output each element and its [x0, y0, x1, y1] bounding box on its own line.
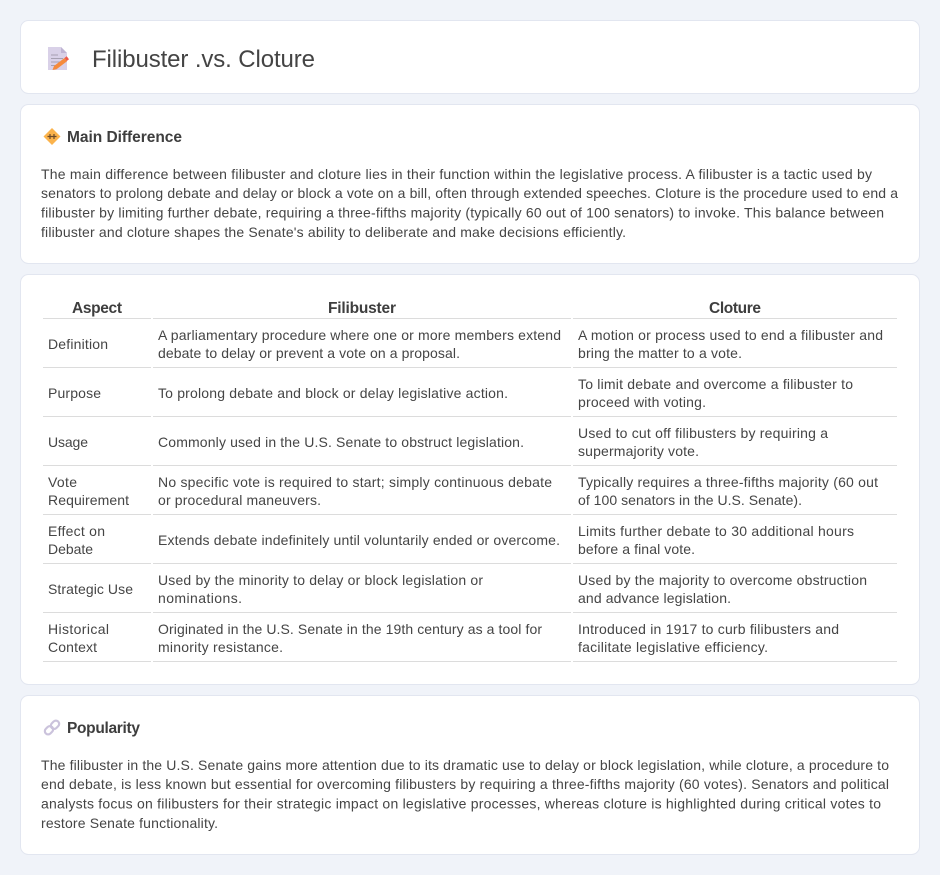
table row: vote requirement: Vote [48, 474, 77, 490]
table row: purpose: To limit debate and overcome a filibuster to [578, 376, 853, 392]
table row: effect on debate: Effect on [48, 523, 105, 539]
panel: main difference [20, 104, 920, 264]
table row: usage [43, 425, 897, 466]
table header row: Cloture [709, 300, 761, 317]
icon: chain link [44, 719, 60, 736]
text block: popularity [41, 757, 889, 831]
table row: vote requirement: No specific vote is required to start; simply continuous debate [158, 474, 552, 490]
panel: comparison table [20, 274, 920, 684]
table row: historical context: minority resistance. [158, 639, 283, 655]
table row: purpose: Purpose [48, 385, 101, 401]
table row: effect on debate: Limits further debate to 30 additional hours [578, 523, 854, 539]
table row: definition: A parliamentary procedure where one or more members extend [158, 327, 561, 343]
text block: popularity: restore Senate functionality. [41, 815, 218, 831]
text block: popularity: end debate, is less known but essential for overcoming filibusters by requiring a three-fifths majority (60 votes). Senators and political [41, 776, 889, 792]
panel: title header [20, 20, 920, 94]
table row: historical context: Introduced in 1917 to curb filibusters and [578, 621, 839, 637]
table row: effect on debate: Debate [48, 541, 93, 557]
table row: purpose [43, 376, 897, 417]
table row: strategic use: and advance legislation. [578, 590, 731, 606]
table row: effect on debate [43, 523, 897, 564]
text block: main difference: filibuster and cloture shapes the Senate's ability to deliberate and make decisions efficiently. [41, 224, 626, 240]
table row: definition: A motion or process used to end a filibuster and [578, 327, 883, 343]
table header row: Aspect [72, 300, 122, 317]
text block: main difference: senators to prolong debate and delay or block a vote on a bill, often through extended speeches. Cloture is the procedure used to end a [41, 185, 898, 201]
table header row [43, 300, 897, 319]
text block: main difference: filibuster by limiting further debate, requiring a three-fifths majority (typically 60 out of 100 senators) to invoke. This balance between [41, 204, 884, 220]
table row: historical context: Originated in the U.S. Senate in the 19th century as a tool for [158, 621, 542, 637]
icon: document with pencil [48, 47, 69, 70]
table row: usage: Commonly used in the U.S. Senate to obstruct legislation. [158, 434, 524, 450]
heading: popularity: Popularity [67, 720, 140, 737]
table row: usage: supermajority vote. [578, 443, 699, 459]
table row: definition: bring the matter to a vote. [578, 345, 742, 361]
table row: strategic use: Used by the majority to overcome obstruction [578, 572, 867, 588]
table row: definition: Definition [48, 336, 108, 352]
table row: purpose: proceed with voting. [578, 394, 706, 410]
table row: usage: Usage [48, 434, 88, 450]
table row: vote requirement [43, 474, 897, 515]
heading: main difference: Main Difference [67, 129, 182, 146]
table row: strategic use: Used by the minority to delay or block legislation or [158, 572, 483, 588]
icon: orange diamond [44, 128, 60, 145]
table row: definition [43, 327, 897, 368]
panel: popularity [20, 696, 920, 854]
table row: historical context: Context [48, 639, 97, 655]
table row: effect on debate: Extends debate indefinitely until voluntarily ended or overcome. [158, 532, 560, 548]
table row: purpose: To prolong debate and block or delay legislative action. [158, 385, 508, 401]
table row: strategic use: nominations. [158, 590, 242, 606]
table row: vote requirement: or procedural maneuvers. [158, 492, 321, 508]
table row: vote requirement: Requirement [48, 492, 129, 508]
table row: historical context: Historical [48, 621, 109, 637]
table row: effect on debate: before a final vote. [578, 541, 695, 557]
table row: historical context [43, 621, 897, 662]
table row: strategic use: Strategic Use [48, 581, 133, 597]
text block: main difference [41, 166, 898, 240]
text block: main difference: The main difference between filibuster and cloture lies in their function within the legislative process. A filibuster is a tactic used by [41, 166, 872, 182]
table row: usage: Used to cut off filibusters by requiring a [578, 425, 828, 441]
table row: historical context: facilitate legislative efficiency. [578, 639, 768, 655]
table header row: Filibuster [328, 300, 396, 317]
table row: definition: debate to delay or prevent a vote on a proposal. [158, 345, 460, 361]
table row: vote requirement: Typically requires a three-fifths majority (60 out [578, 474, 878, 490]
table row: vote requirement: of 100 senators in the U.S. Senate). [578, 492, 802, 508]
table row: strategic use [43, 572, 897, 613]
title: Filibuster .vs. Cloture [92, 46, 315, 73]
text block: popularity: The filibuster in the U.S. Senate gains more attention due to its dramatic use to delay or block legislation, while cloture, a procedure to [41, 757, 889, 773]
text block: popularity: analysts focus on filibusters for their strategic impact on legislative processes, whereas cloture is highlighted during critical votes to [41, 796, 881, 812]
